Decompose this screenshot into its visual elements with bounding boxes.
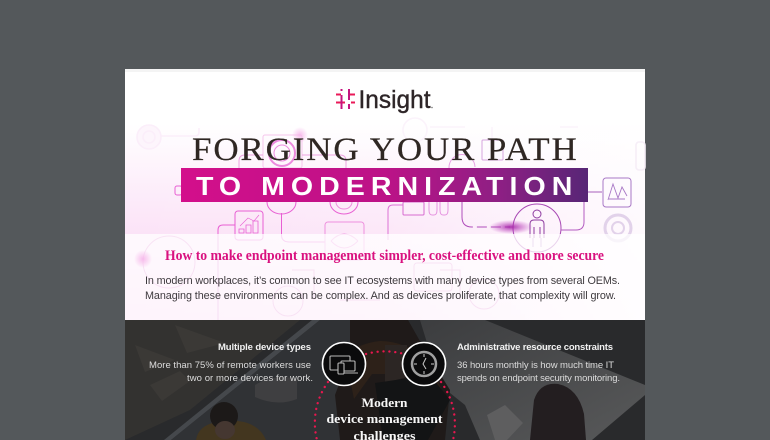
circuit network illustration (137, 118, 645, 320)
dotted challenge ring (315, 351, 455, 440)
photo: window foliage (125, 320, 300, 440)
text block: multiple device types: Multiple device types (218, 342, 311, 353)
photo: right person (530, 384, 586, 440)
subtitle: How to make endpoint management simpler, cost-effective and more secure (165, 248, 604, 264)
panel: challenges photo (125, 320, 645, 440)
logo: Insight: Insight (358, 86, 431, 114)
intro text: Managing these environments can be complex. And as devices proliferate, that complexity will grow. (145, 290, 616, 302)
translucent text strip (125, 234, 645, 320)
title band: To modernization: TO MODERNIZATION (196, 171, 572, 201)
ring heading: Modern (362, 395, 408, 410)
text block: administrative resource constraints: 36 hours monthly is how much time IT (457, 360, 614, 371)
text block: administrative resource constraints: Administrative resource constraints (457, 342, 613, 353)
photo: desk (420, 320, 645, 440)
photo: papers (487, 405, 523, 440)
intro text: In modern workplaces, it’s common to see IT ecosystems with many device types from several OEMs. (145, 275, 620, 287)
ring heading: device management (326, 411, 443, 426)
text block: administrative resource constraints (457, 342, 620, 384)
photo: centre person (335, 320, 450, 440)
intro text (145, 275, 620, 302)
photo: left person (196, 420, 266, 440)
faint icons behind text strip (143, 236, 499, 320)
text block: multiple device types: More than 75% of remote workers use (149, 360, 311, 371)
photo: floor and pillar (171, 320, 350, 440)
text block: multiple device types (149, 342, 313, 384)
icon: devices (322, 342, 366, 386)
icon: clock (402, 342, 446, 386)
icon: logo mark (336, 89, 355, 109)
ring heading (326, 395, 443, 440)
title: Forging your path: FORGING YOUR PATH (192, 132, 577, 168)
text block: multiple device types: two or more devices for work. (187, 373, 313, 384)
text block: administrative resource constraints: spends on endpoint security monitoring. (457, 373, 620, 384)
photo: sill (164, 320, 320, 440)
panel: header (125, 69, 645, 320)
